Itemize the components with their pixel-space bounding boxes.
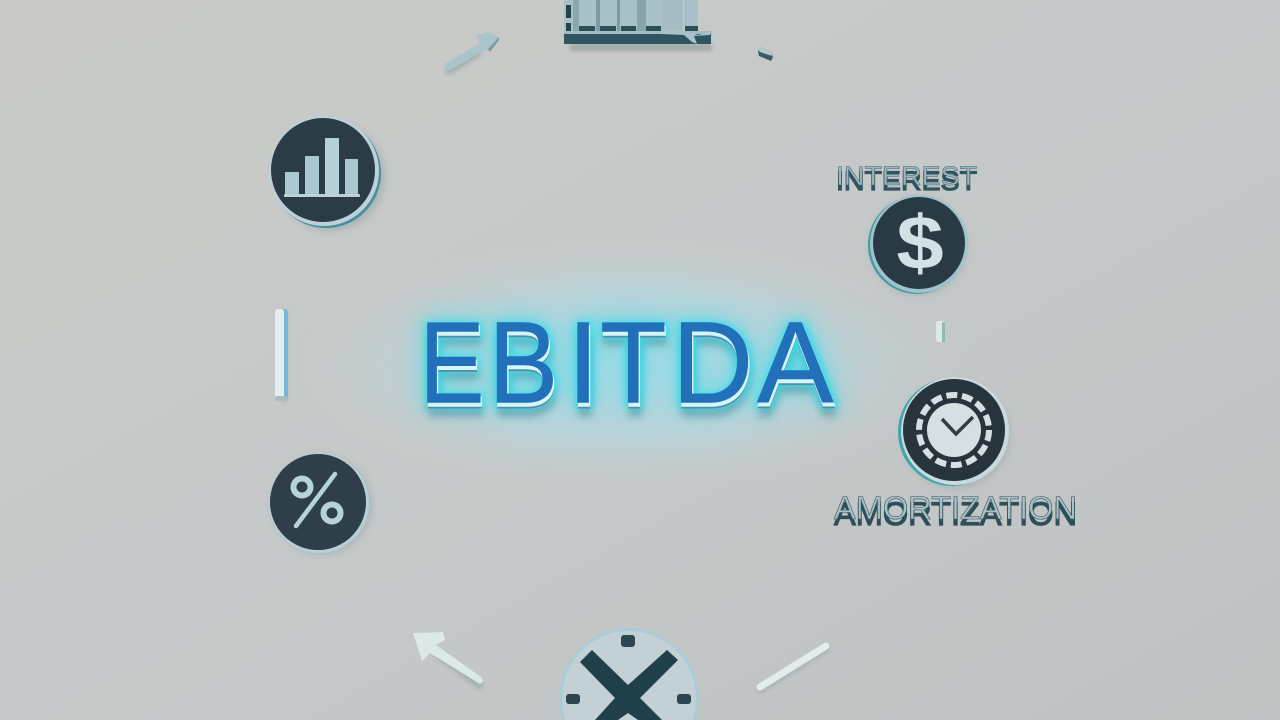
icon: interest dollar badge: $ (896, 201, 944, 286)
dash: top right (758, 47, 773, 61)
icon: top bar chart (cropped) (564, 0, 712, 51)
label: interest: INTEREST (836, 161, 977, 191)
title: EBITDA (420, 297, 836, 440)
arrow: upper left (449, 32, 499, 71)
dash: lower right (760, 646, 827, 690)
dash: right (936, 321, 945, 342)
arrow: lower left (413, 632, 483, 686)
icon: percent badge (269, 453, 372, 555)
icon: interest dollar badge (868, 195, 968, 295)
central glow (300, 240, 960, 490)
divider bar: left (275, 309, 288, 402)
icon: bottom clock with X (cropped) (559, 628, 699, 720)
icon: bar chart badge (269, 116, 385, 231)
icon: amortization clock badge (898, 377, 1010, 489)
label: amortization: AMORTIZATION (834, 496, 1077, 532)
label: amortization: AMORTIZATION (834, 490, 1077, 526)
label: interest: INTEREST (836, 166, 977, 196)
